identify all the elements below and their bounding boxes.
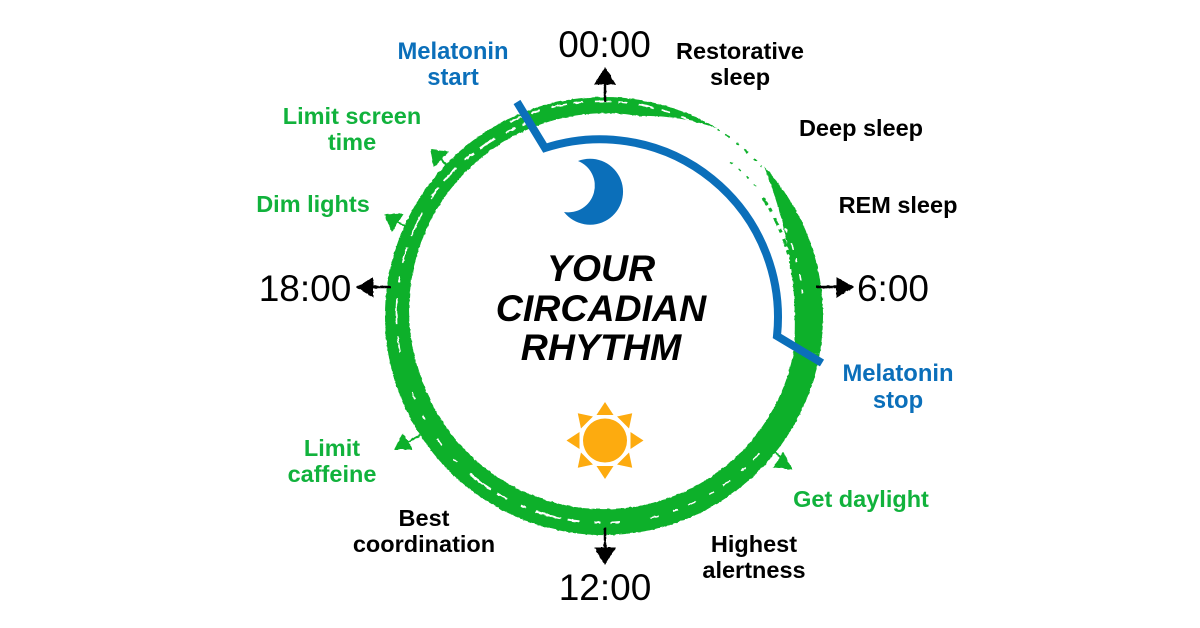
ring: white scratches lower left xyxy=(412,392,490,490)
time label: 00:00: 00:00 xyxy=(558,24,651,65)
ring: thick lower band xyxy=(405,352,807,522)
ring: white scratches upper left xyxy=(432,122,530,196)
ring: tapered right band xyxy=(764,167,823,354)
ring: tapered left and top band xyxy=(385,97,642,391)
label: REM sleep: REM sleep xyxy=(839,192,957,218)
time label: 18:00: 18:00 xyxy=(259,268,351,309)
label: limit caffeine: caffeine xyxy=(288,461,376,487)
label: best coordination: Best xyxy=(399,505,450,531)
blue melatonin bracket xyxy=(517,102,822,363)
label: highest alertness: alertness xyxy=(702,557,806,583)
label: melatonin stop: Melatonin xyxy=(842,360,954,387)
label: best coordination: coordination xyxy=(353,531,495,557)
arrow: 6:00 xyxy=(816,278,853,297)
label: get daylight: Get daylight xyxy=(793,486,929,512)
ring: inner top flecks xyxy=(730,162,756,186)
ring: faint upper right flecks xyxy=(717,129,762,167)
label: limit screen time: Limit screen xyxy=(283,103,421,129)
ring: white scratches bottom xyxy=(470,474,620,523)
title: CIRCADIAN xyxy=(496,287,707,329)
label: melatonin start: start xyxy=(427,64,479,91)
green brush ring xyxy=(385,97,823,523)
label: deep sleep: Deep sleep xyxy=(799,115,923,141)
ring: white scratches top xyxy=(510,101,710,131)
label: restorative sleep: Restorative xyxy=(676,38,804,64)
ring: right inner flecks xyxy=(763,198,795,290)
label: restorative sleep: sleep xyxy=(710,64,770,90)
title: RHYTHM xyxy=(521,326,682,368)
arrow: 00:00 xyxy=(595,68,615,102)
label: limit caffeine: Limit xyxy=(304,435,360,461)
label: limit screen time: time xyxy=(328,129,376,155)
icon: moon xyxy=(564,159,623,225)
label: dim lights: Dim lights xyxy=(256,191,370,217)
arrow: limit screen time xyxy=(431,150,450,170)
ring: white scratches upper right xyxy=(778,214,803,300)
ring: white scratches lower right xyxy=(650,450,762,518)
label: melatonin stop: stop xyxy=(873,387,923,414)
arrow: get daylight xyxy=(771,447,792,469)
arrow: 18:00 xyxy=(357,278,391,297)
label: highest alertness: Highest xyxy=(711,531,797,557)
ring: white scratches left xyxy=(396,186,440,352)
time label: 6:00: 6:00 xyxy=(857,268,929,309)
arrow: dim lights xyxy=(385,214,405,231)
arrow: 12:00 xyxy=(595,528,615,564)
arrow: limit caffeine xyxy=(395,434,420,449)
label: melatonin start: Melatonin xyxy=(397,38,509,65)
title: YOUR xyxy=(547,247,655,289)
time label: 12:00: 12:00 xyxy=(559,567,651,608)
ring: tapered top right band xyxy=(638,100,717,128)
icon: sun xyxy=(566,402,644,479)
